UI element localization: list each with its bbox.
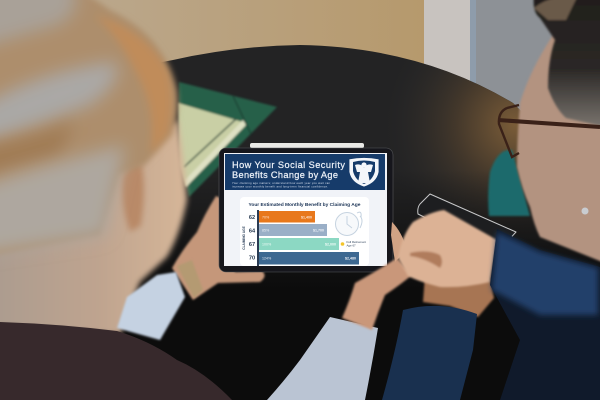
bar row age 62: 62 bbox=[249, 215, 255, 221]
hair grey highlight bbox=[0, 62, 117, 145]
knuckle shadow bbox=[410, 251, 442, 268]
bar row age 64: $1,700 bbox=[313, 228, 324, 232]
bar row age 70: 70 bbox=[249, 256, 255, 262]
right person right arm shirt bbox=[267, 317, 378, 400]
infographic title: How Your Social Security bbox=[232, 160, 345, 170]
smartphone bbox=[418, 194, 516, 243]
bar row age 67: 67 bbox=[249, 242, 255, 248]
icon: clock and coins bbox=[336, 212, 362, 236]
denim shoulder highlight bbox=[492, 232, 598, 315]
left person shirt cuff bbox=[117, 272, 185, 340]
axis line bbox=[257, 210, 259, 266]
full retirement age note: Full Retirement bbox=[346, 240, 366, 244]
right person lower wrist bbox=[423, 275, 494, 317]
green folder bbox=[178, 82, 277, 197]
chart title: Your Estimated Monthly Benefit by Claiming Age bbox=[248, 202, 361, 208]
infographic title line two: Benefits Change by Age bbox=[232, 170, 338, 180]
hair curls bbox=[534, 0, 578, 20]
chart card bbox=[240, 197, 369, 266]
bar row age 62: $1,400 bbox=[301, 216, 312, 220]
icon: shield logo bbox=[349, 158, 379, 187]
left person ear bbox=[122, 163, 144, 232]
full retirement age note line two: Age 67 bbox=[346, 244, 356, 248]
hair lower grey bbox=[0, 145, 125, 255]
infographic subtitle line two: increase your monthly benefit and long-term financial confidence. bbox=[232, 184, 328, 188]
bar row age 62 bbox=[249, 211, 315, 222]
hair top grey bbox=[0, 0, 76, 50]
earring bbox=[582, 208, 588, 214]
hair brown left bbox=[0, 120, 75, 180]
glasses bbox=[498, 105, 600, 157]
right person face bbox=[517, 35, 600, 263]
axis label: CLAIMING AGE bbox=[242, 226, 246, 250]
left person sweater bbox=[0, 322, 232, 400]
right person hair bbox=[534, 0, 600, 127]
notebook pages bbox=[185, 120, 246, 187]
left person hair bbox=[0, 0, 178, 260]
notebook paper bbox=[178, 103, 246, 187]
background: wall edge bbox=[470, 0, 476, 85]
bar row age 64 bbox=[249, 224, 327, 236]
right person hand on tablet bbox=[342, 258, 412, 330]
infographic header band bbox=[225, 154, 385, 190]
bar row age 70 bbox=[249, 252, 359, 264]
bar row age 67 bbox=[249, 238, 339, 250]
tablet bbox=[219, 148, 393, 272]
right person fingers bbox=[391, 222, 407, 262]
infographic subtitle: Your claiming age matters; understand how each year you wait can bbox=[232, 181, 330, 185]
right person lower denim sleeve bbox=[382, 306, 477, 400]
folder strap bbox=[184, 96, 251, 167]
bar row age 64: 85% bbox=[262, 228, 270, 232]
bar row age 62: 70% bbox=[262, 216, 270, 220]
right person main hand bbox=[398, 210, 497, 287]
tablet body bbox=[219, 148, 393, 272]
bar row age 67: $2,000 bbox=[325, 242, 336, 246]
left person neck and face bbox=[0, 120, 187, 335]
background: pale wall strip bbox=[424, 0, 472, 100]
background: grey wall bbox=[472, 0, 600, 140]
bar row age 70: $2,480 bbox=[345, 256, 356, 260]
right person upper denim shirt bbox=[490, 229, 600, 400]
bar row age 67: 100% bbox=[262, 242, 272, 246]
stylus pencil bbox=[250, 143, 364, 148]
bar row age 64: 64 bbox=[249, 228, 256, 234]
gold watch bbox=[177, 260, 203, 298]
teal mug bbox=[488, 150, 530, 216]
background: wood wall bbox=[0, 0, 428, 110]
bar row age 70: 124% bbox=[262, 256, 272, 260]
icon: lightbulb bbox=[341, 242, 344, 246]
hair copper streak bbox=[95, 15, 172, 155]
tablet screen bbox=[224, 153, 387, 266]
left person hand bbox=[172, 196, 265, 300]
